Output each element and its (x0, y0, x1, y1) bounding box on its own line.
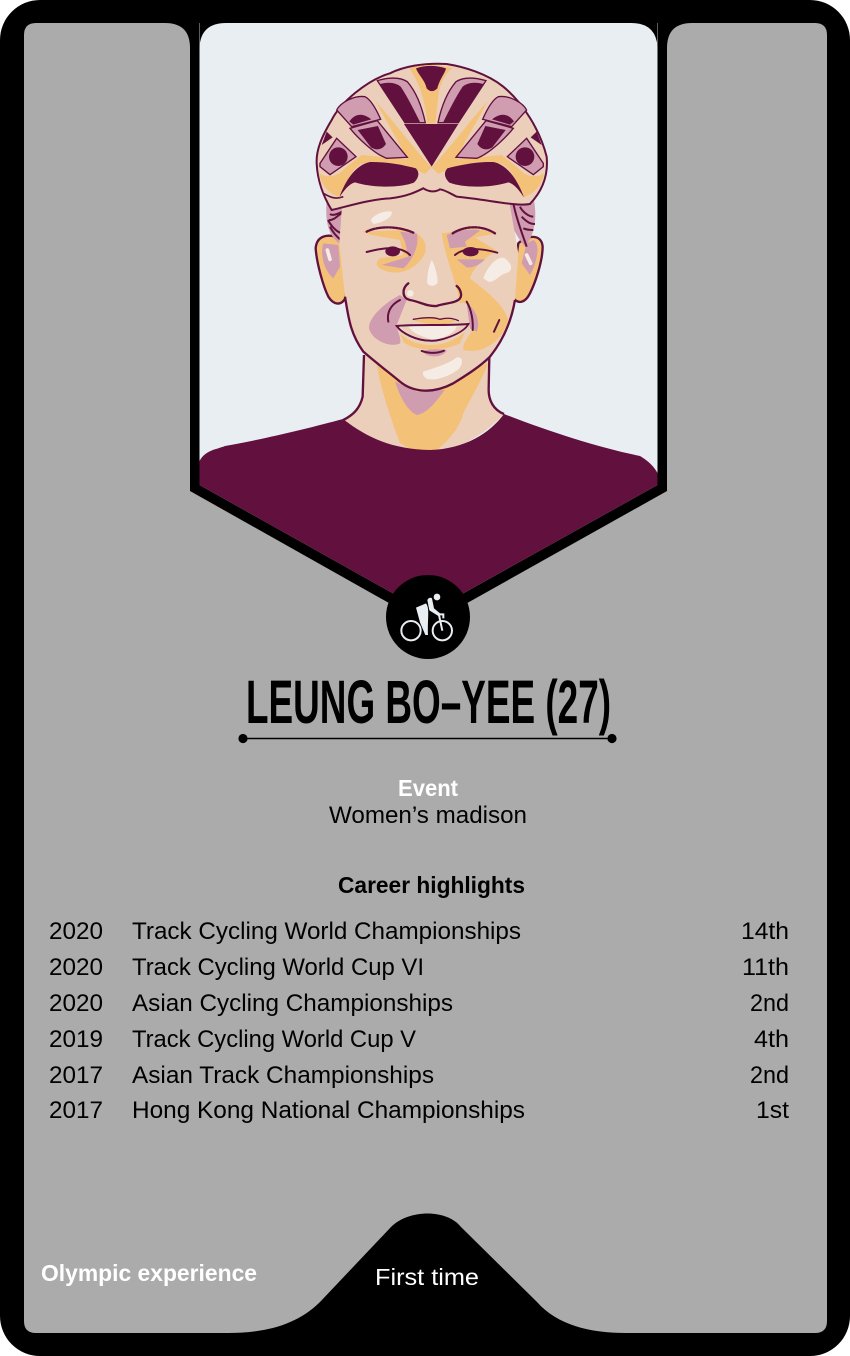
portrait: shirt (200, 414, 658, 594)
name heading: LEUNG BO–YEE (27) (246, 668, 611, 736)
olympic experience label: Olympic experience (41, 1260, 257, 1286)
career highlights table: 2017 (49, 1097, 103, 1124)
career highlights table: 2020 (49, 918, 103, 945)
olympic experience value: First time (375, 1264, 479, 1290)
career highlights table: 2019 (49, 1026, 103, 1053)
name underline (238, 734, 617, 743)
career highlights table: Asian Cycling Championships (132, 990, 453, 1017)
career highlights table: Track Cycling World Championships (132, 918, 521, 945)
portrait: helmet (317, 64, 547, 210)
career highlights table: 4th (754, 1026, 789, 1053)
event label: Event (398, 775, 458, 801)
career highlights table: 2nd (750, 1062, 789, 1089)
career highlights table: 1st (756, 1097, 789, 1124)
icon: cyclist badge (386, 575, 470, 659)
career highlights table: 11th (742, 954, 789, 981)
career highlights table: 2017 (49, 1062, 103, 1089)
career highlights table: 2nd (750, 990, 789, 1017)
career highlights table: 14th (741, 918, 789, 945)
career highlights table: Track Cycling World Cup V (132, 1026, 416, 1053)
panel: portrait (199, 23, 658, 620)
portrait corner hairline left (198, 23, 200, 50)
career highlights table: Track Cycling World Cup VI (132, 954, 424, 981)
event value: Women’s madison (329, 802, 527, 829)
career highlights table: Hong Kong National Championships (132, 1097, 525, 1124)
career highlights heading: Career highlights (338, 872, 525, 898)
portrait: neck, ears, hair and face (316, 187, 543, 453)
career highlights table: Asian Track Championships (132, 1062, 434, 1089)
career highlights table: 2020 (49, 954, 103, 981)
helmet: yellow streaks left (319, 102, 432, 197)
career highlights table: 2020 (49, 990, 103, 1017)
career highlights table (49, 918, 789, 1124)
portrait corner hairline right (656, 23, 658, 50)
